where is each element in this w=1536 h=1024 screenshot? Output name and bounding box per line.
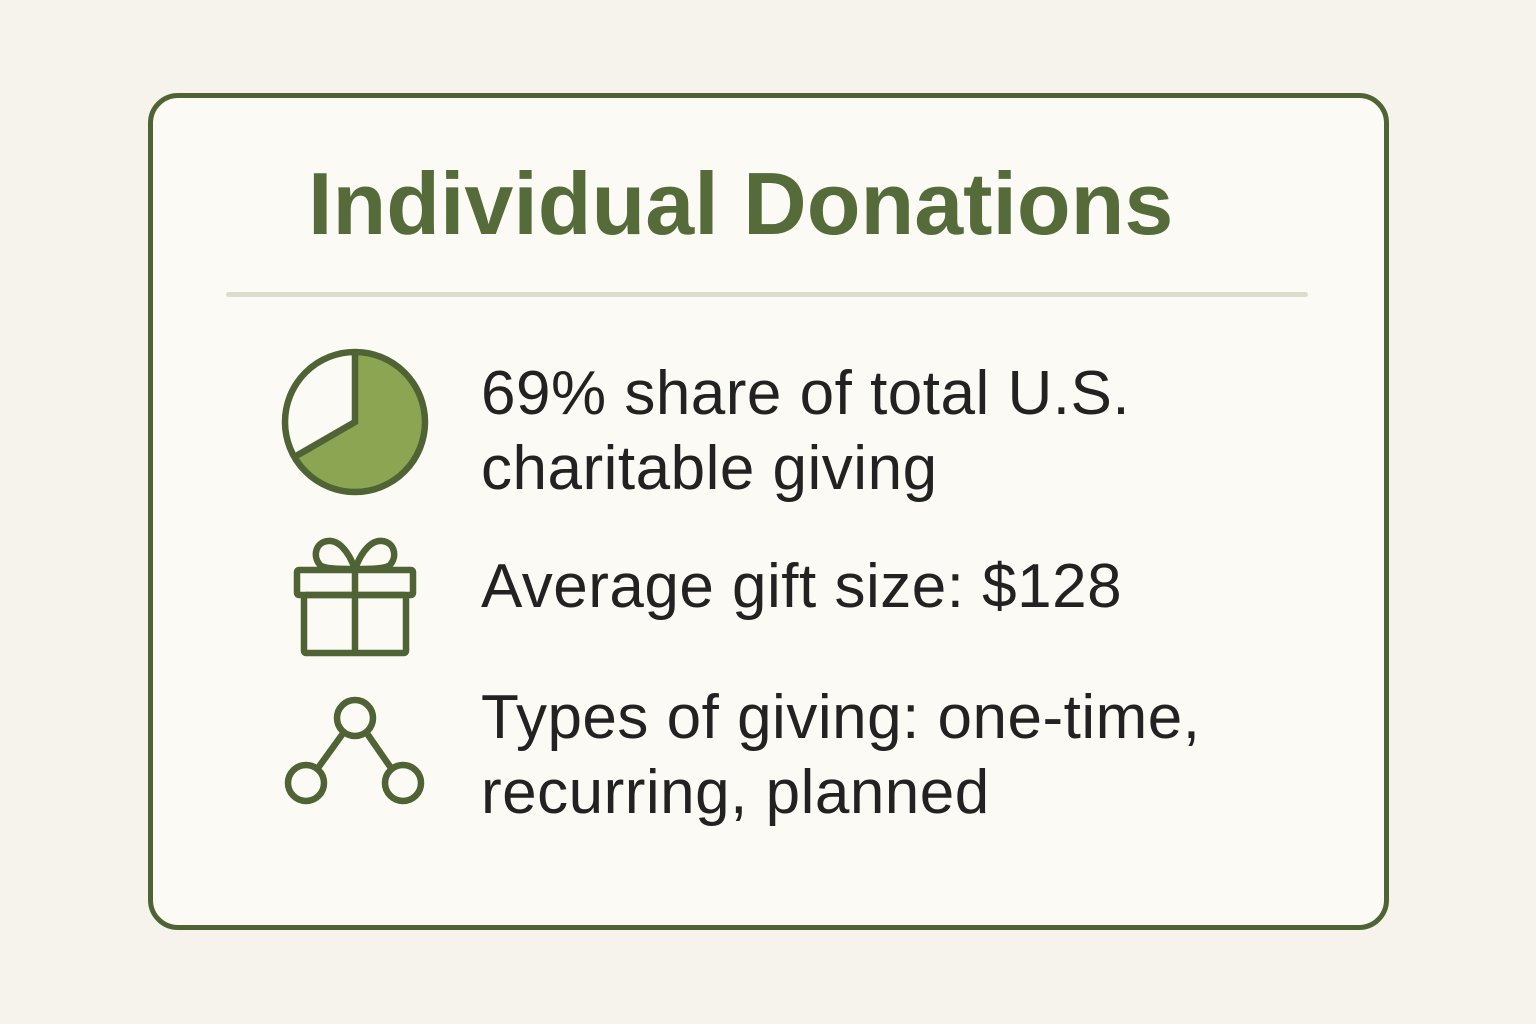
text: types: Types of giving: one-time,	[481, 683, 1200, 752]
text: gift size: Average gift size: $128	[481, 552, 1122, 621]
icon: pie chart	[282, 348, 428, 496]
icon: gift	[294, 538, 416, 656]
text: types: recurring, planned	[481, 758, 990, 827]
panel: card	[148, 93, 1389, 930]
icon: network	[284, 696, 424, 804]
text: share: charitable giving	[481, 434, 938, 503]
text: types	[481, 683, 1200, 827]
title: Individual Donations	[308, 154, 1173, 253]
text: share: 69% share of total U.S.	[481, 359, 1130, 428]
text: share	[481, 359, 1130, 503]
